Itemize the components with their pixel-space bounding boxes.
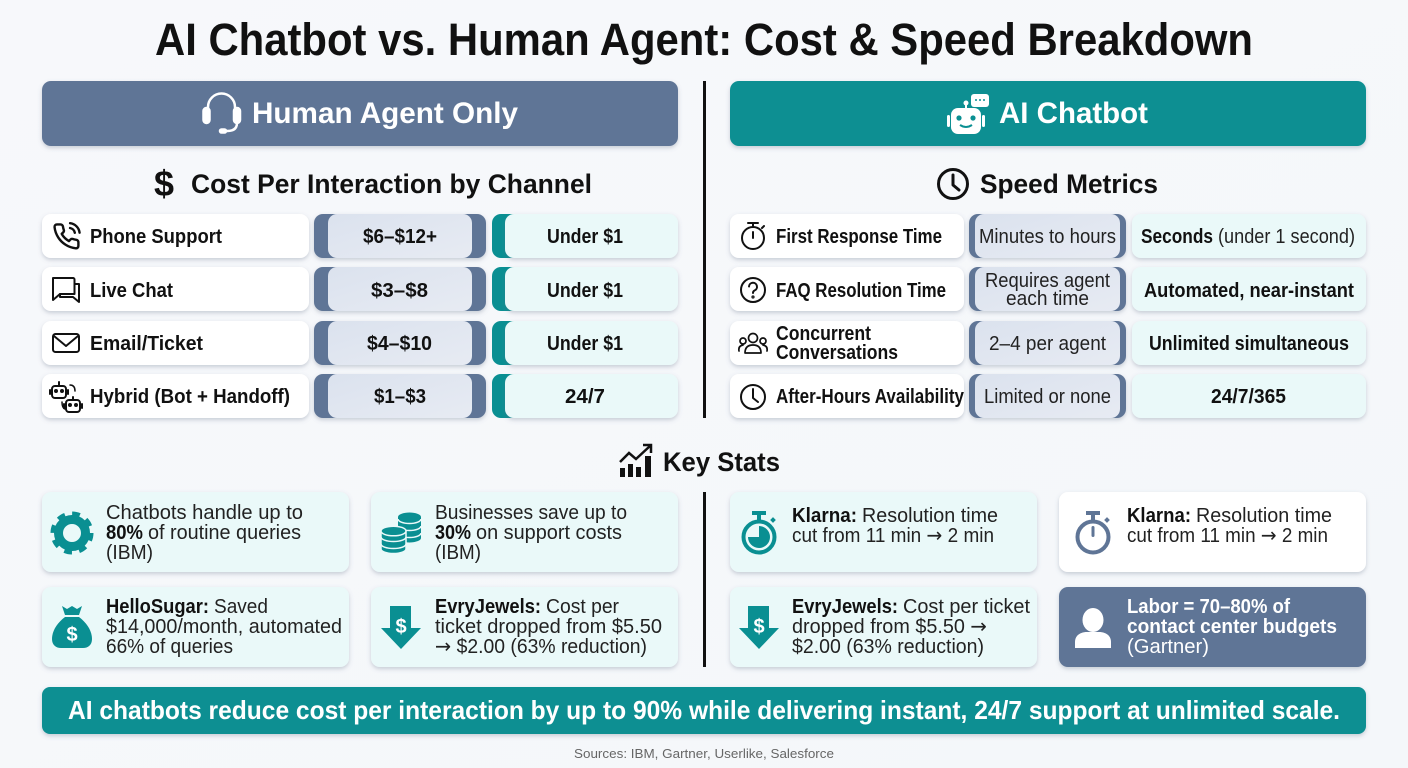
row: phone support: $6–$12+: [363, 226, 437, 248]
stat card: EvryJewels right: dropped from $5.50 →: [792, 614, 987, 638]
stat card: EvryJewels left: → $2.00 (63% reduction): [435, 634, 647, 658]
panel: speed table: [730, 214, 1366, 418]
stat card: EvryJewels left: [371, 587, 678, 667]
stat card: labor share: Labor = 70–80% of: [1127, 596, 1290, 618]
header: AI Chatbot: [730, 81, 1366, 146]
stat card: Klarna white: [1059, 492, 1366, 572]
row: FAQ resolution time: Automated, near-instant: [1144, 280, 1354, 302]
stat card: EvryJewels left: Cost per: [546, 596, 619, 618]
row: first response time: Minutes to hours: [979, 226, 1116, 248]
heading text: Cost Per Interaction by Channel: [191, 169, 592, 199]
stat card: chatbots handle 80%: 80%: [106, 522, 143, 544]
stat card: labor share: (Gartner): [1127, 636, 1209, 658]
icon: headset: [204, 94, 240, 132]
row: FAQ resolution time: [730, 267, 1366, 311]
icon: envelope: [53, 334, 79, 352]
row: phone support: [42, 214, 678, 258]
stat card: Klarna teal: [730, 492, 1037, 572]
icon: phone: [55, 223, 80, 248]
row: hybrid: [42, 374, 678, 418]
stat card: businesses save 30%: (IBM): [435, 542, 481, 564]
row: FAQ resolution time: Requires agent: [985, 270, 1110, 292]
stat card: labor share: [1059, 587, 1366, 667]
row: first response time: Seconds: [1141, 226, 1213, 248]
stat card: HelloSugar: $14,000/month, automated: [106, 616, 342, 638]
icon: money bag: $: [66, 624, 78, 646]
summary banner: [42, 687, 1366, 734]
icon: growth chart: [620, 445, 651, 477]
stat card: EvryJewels right: Cost per ticket: [903, 596, 1030, 618]
summary banner: AI chatbots reduce cost per interaction by up to 90% while delivering instant, 24/7 support at unlimited scale.: [68, 695, 1340, 725]
center divider: [703, 81, 706, 667]
icon: teal stopwatch: [744, 511, 776, 552]
stat card: Klarna white: Klarna:: [1127, 505, 1191, 527]
title: AI Chatbot vs. Human Agent: Cost & Speed Breakdown: [155, 14, 1253, 65]
row: concurrent conversations: 2–4 per agent: [989, 333, 1106, 355]
row: live chat: Live Chat: [90, 280, 173, 302]
icon: slate stopwatch: [1078, 511, 1110, 552]
row: after-hours availability: 24/7/365: [1211, 386, 1286, 408]
stat card: Klarna white: Resolution time: [1196, 505, 1332, 527]
icon: two bots handoff: [50, 382, 82, 412]
row: phone support: Under $1: [547, 226, 623, 248]
row: hybrid: Hybrid (Bot + Handoff): [90, 386, 290, 408]
stat card: HelloSugar: Saved: [214, 596, 268, 618]
header label: Human Agent Only: [252, 97, 518, 130]
row: email/ticket: [42, 321, 678, 365]
icon: people: [739, 334, 767, 353]
stat card: HelloSugar: 66% of queries: [106, 636, 233, 658]
stat card: Klarna teal: Klarna:: [792, 505, 857, 527]
heading text: Key Stats: [663, 447, 780, 477]
stat card: chatbots handle 80%: (IBM): [106, 542, 153, 564]
row: after-hours availability: After-Hours Availability: [776, 386, 965, 408]
row: FAQ resolution time: each time: [1006, 288, 1089, 310]
icon: person: [1075, 608, 1111, 648]
row: after-hours availability: Limited or none: [984, 386, 1111, 408]
row: email/ticket: Under $1: [547, 333, 623, 355]
panel: cost table: [42, 214, 678, 418]
stat card: EvryJewels left: ticket dropped from $5.50: [435, 616, 662, 638]
stat card: EvryJewels right: EvryJewels:: [792, 596, 898, 618]
row: concurrent conversations: [730, 321, 1366, 365]
stat card: chatbots handle 80%: of routine queries: [148, 522, 301, 544]
icon: dollar: $: [154, 163, 174, 204]
row: live chat: [42, 267, 678, 311]
section heading: cost per interaction: [154, 163, 592, 204]
row: live chat: $3–$8: [371, 280, 428, 302]
row: concurrent conversations: Unlimited simultaneous: [1149, 333, 1349, 355]
icon: down arrow dollar: $: [395, 616, 407, 638]
row: hybrid: $1–$3: [374, 386, 426, 408]
stat card: Klarna teal: cut from 11 min → 2 min: [792, 523, 994, 547]
icon: coin stacks: [381, 512, 421, 554]
icon: down arrow dollar: $: [753, 616, 765, 638]
icon: clock: [938, 170, 968, 198]
icon: stopwatch: [742, 223, 764, 249]
row: first response time: [730, 214, 1366, 258]
stat card: EvryJewels left: EvryJewels:: [435, 596, 541, 618]
row: email/ticket: $4–$10: [367, 333, 432, 355]
row: phone support: Phone Support: [90, 226, 222, 248]
stat card: EvryJewels right: [730, 587, 1037, 667]
row: first response time: First Response Time: [776, 226, 942, 248]
stat card: Klarna white: cut from 11 min → 2 min: [1127, 523, 1328, 547]
row: after-hours availability: [730, 374, 1366, 418]
heading text: Speed Metrics: [980, 169, 1158, 199]
stat card: chatbots handle 80%: [42, 492, 349, 572]
icon: clock: [741, 385, 765, 409]
icon: down arrow dollar: [381, 606, 421, 649]
stat card: chatbots handle 80%: Chatbots handle up to: [106, 502, 303, 524]
row: hybrid: 24/7: [565, 386, 605, 408]
section heading: speed metrics: [938, 169, 1158, 199]
sources: Sources: IBM, Gartner, Userlike, Salesforce: [574, 746, 834, 761]
header label: AI Chatbot: [999, 97, 1148, 130]
stat card: labor share: contact center budgets: [1127, 616, 1337, 638]
icon: money bag: [52, 606, 92, 648]
stat card: businesses save 30%: [371, 492, 678, 572]
row: concurrent conversations: Conversations: [776, 342, 898, 364]
stat card: businesses save 30%: Businesses save up to: [435, 502, 627, 524]
stat card: businesses save 30%: on support costs: [476, 522, 622, 544]
icon: down arrow dollar: [739, 606, 779, 649]
header: Human Agent Only: [42, 81, 678, 146]
row: FAQ resolution time: FAQ Resolution Time: [776, 280, 946, 302]
row: concurrent conversations: Concurrent: [776, 323, 871, 345]
stat card: HelloSugar: [42, 587, 349, 667]
icon: robot with speech bubble: [947, 94, 989, 134]
row: email/ticket: Email/Ticket: [90, 333, 203, 355]
icon: chat bubbles: [53, 278, 79, 302]
stat card: businesses save 30%: 30%: [435, 522, 471, 544]
stat card: EvryJewels right: $2.00 (63% reduction): [792, 636, 984, 658]
row: first response time: (under 1 second): [1218, 226, 1355, 248]
stat card: Klarna teal: Resolution time: [862, 505, 998, 527]
section heading: key stats: [620, 445, 780, 477]
stat card: HelloSugar: HelloSugar:: [106, 596, 209, 618]
icon: gear: [54, 514, 90, 552]
icon: question mark: [741, 278, 765, 302]
row: live chat: Under $1: [547, 280, 623, 302]
